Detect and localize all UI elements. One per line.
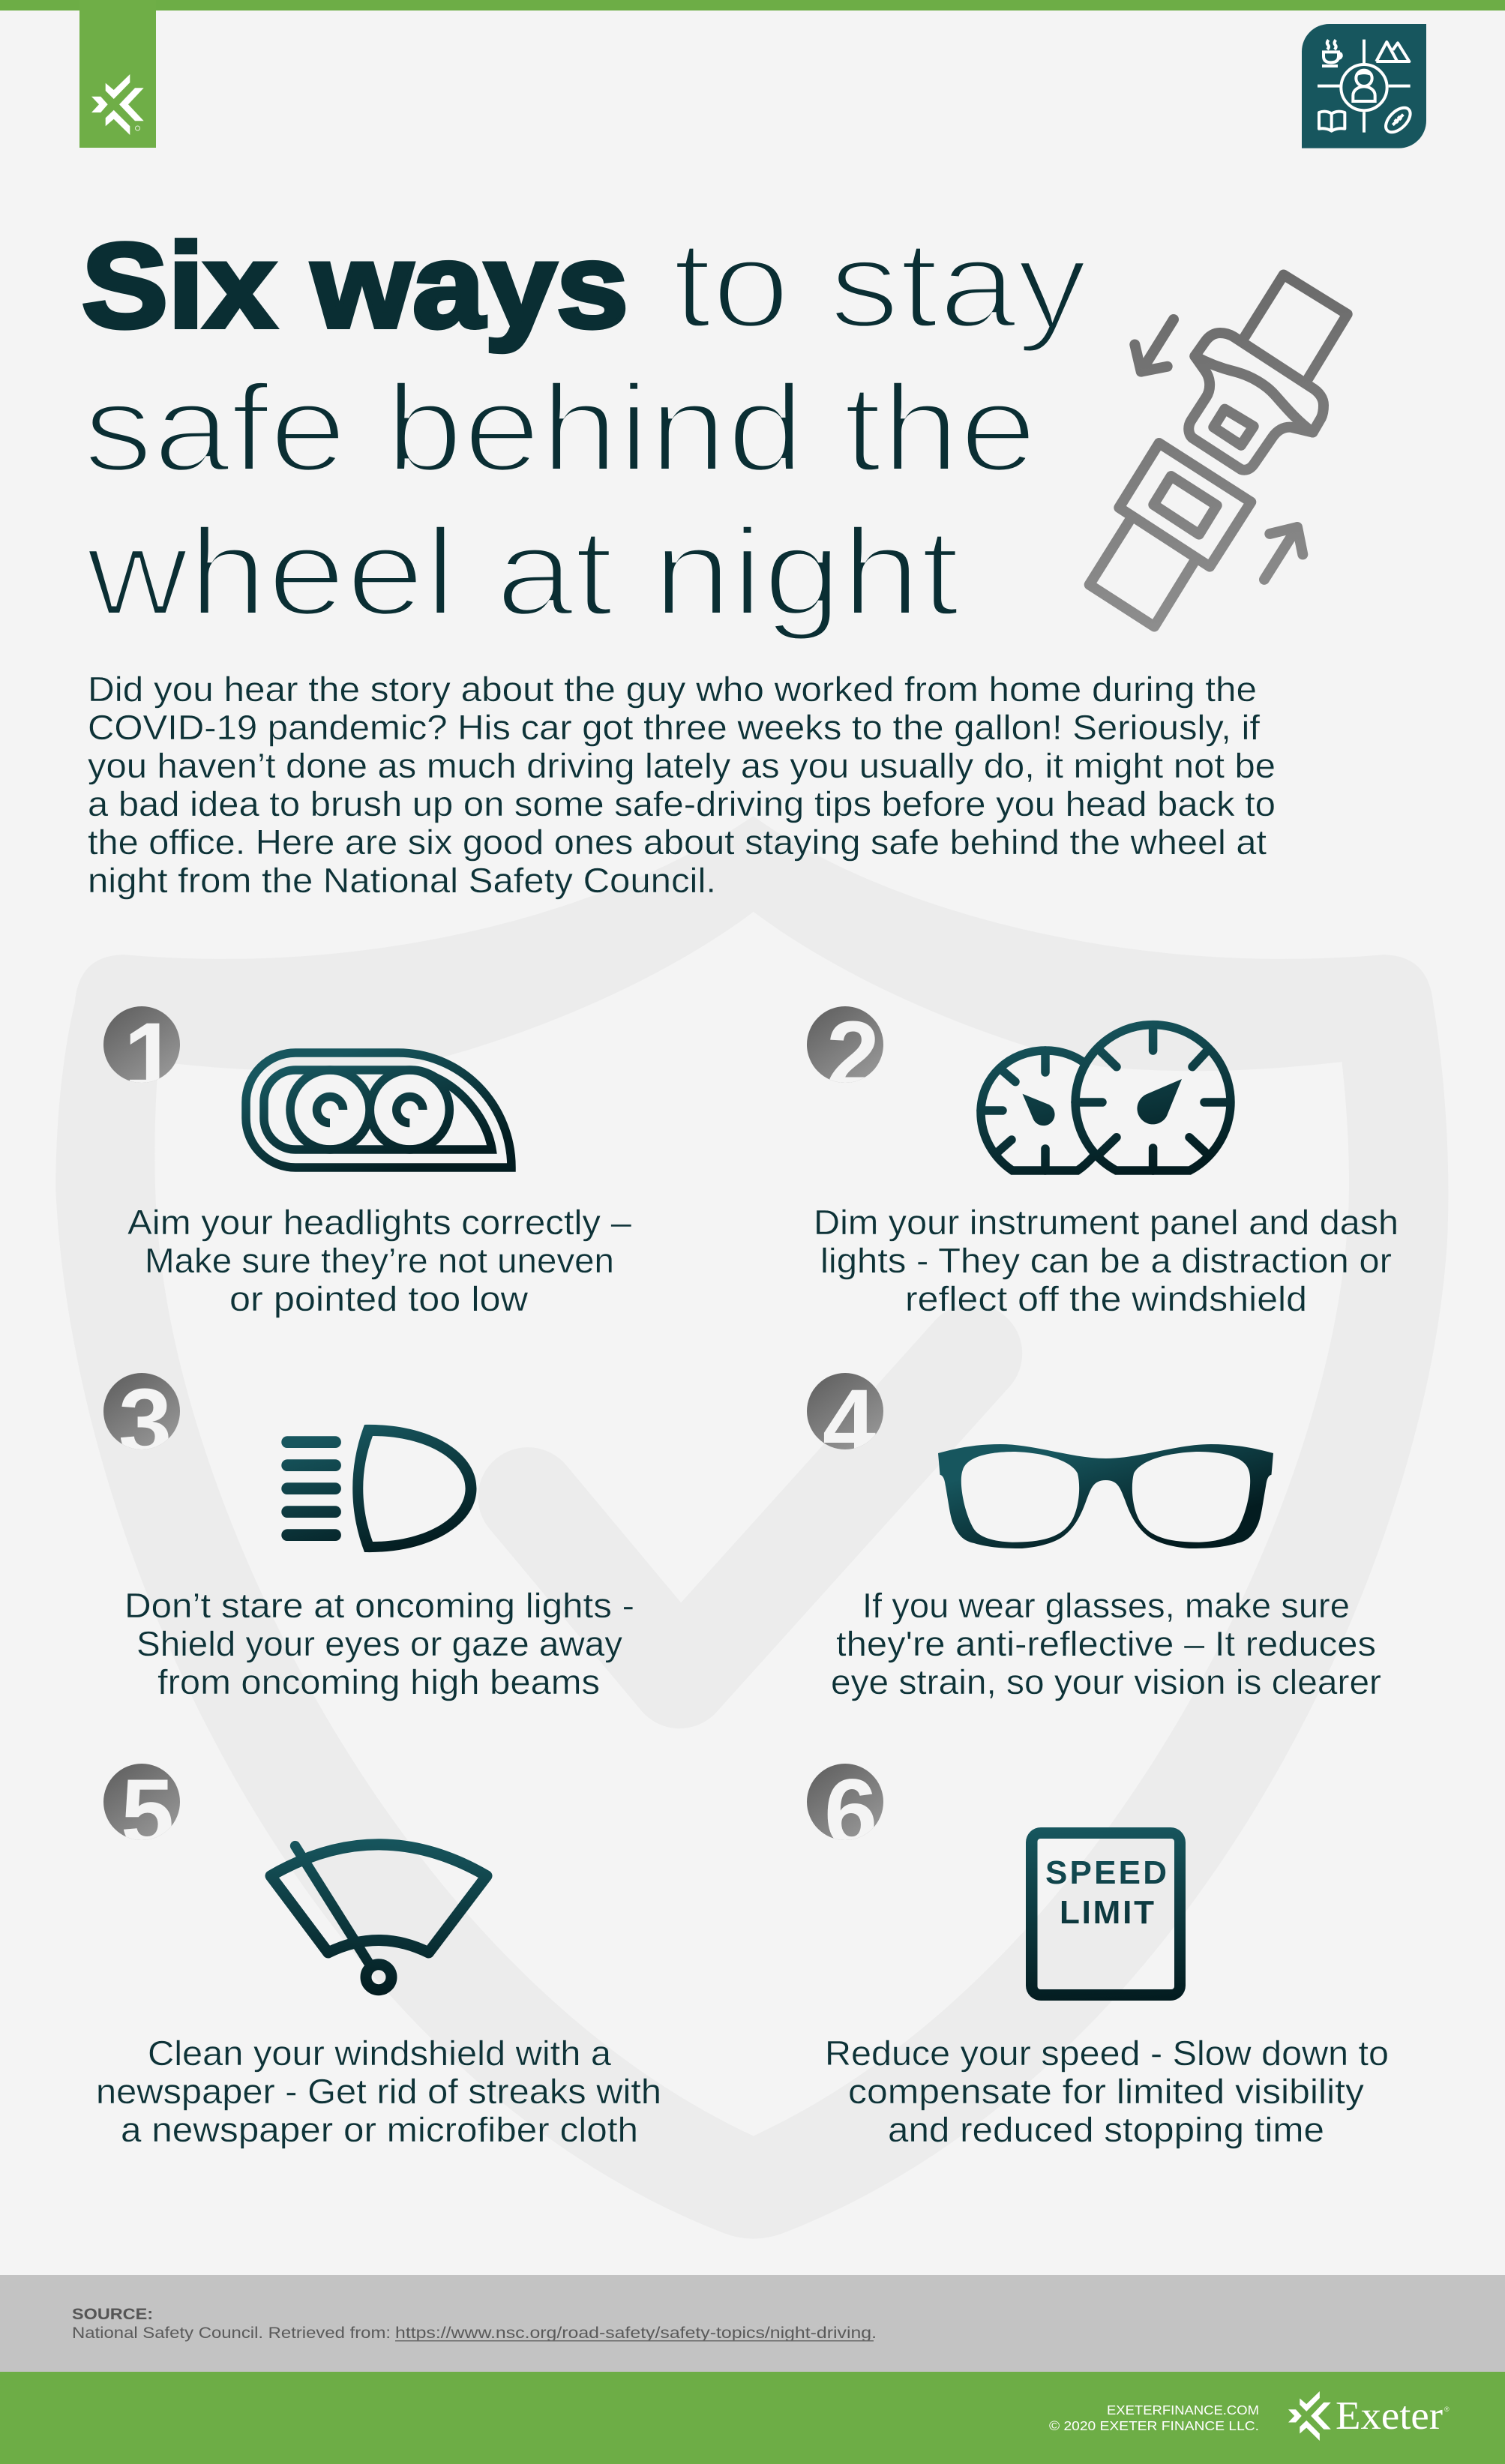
number badge 6: 6 <box>824 1760 877 1867</box>
number badge 1 <box>103 1006 180 1083</box>
top green bar <box>0 0 1505 10</box>
tip text 6: compensate for limited visibility <box>848 2072 1364 2111</box>
number badge 5: 5 <box>121 1760 174 1867</box>
title: safe behind the <box>83 359 1037 498</box>
number badge 1: 1 <box>124 1003 177 1111</box>
title: to stay <box>673 215 1087 354</box>
tip text 2: lights - They can be a distraction or <box>820 1241 1392 1280</box>
intro paragraph: night from the National Safety Council. <box>88 861 716 900</box>
tip text 4: eye strain, so your vision is clearer <box>831 1662 1381 1701</box>
intro paragraph: the office. Here are six good ones about staying safe behind the wheel at <box>88 823 1267 862</box>
title: Six ways <box>82 218 628 352</box>
intro paragraph: Did you hear the story about the guy who worked from home during the <box>88 670 1257 709</box>
source band: SOURCE: <box>72 2306 153 2323</box>
tip text 2: reflect off the windshield <box>905 1279 1307 1318</box>
intro paragraph <box>88 670 1276 900</box>
number badge 6 <box>807 1764 883 1840</box>
intro paragraph: you haven’t done as much driving lately as you usually do, it might not be <box>88 746 1276 785</box>
number badge 3 <box>103 1373 180 1449</box>
panel: tip 4 glasses <box>807 1370 1381 1701</box>
number badge 4 <box>807 1373 883 1449</box>
footer band <box>0 2372 1505 2464</box>
tip text 1: or pointed too low <box>229 1279 529 1318</box>
number badge 5 <box>103 1764 180 1840</box>
tip text 2: Dim your instrument panel and dash <box>814 1203 1399 1242</box>
icon: glasses <box>938 1444 1273 1548</box>
tip text 4 <box>831 1586 1381 1701</box>
number badge 2: 2 <box>826 1002 880 1109</box>
tip text 6 <box>825 2034 1389 2149</box>
badge: lifestyle icons <box>1302 24 1426 148</box>
footer band: © 2020 EXETER FINANCE LLC. <box>1049 2418 1259 2433</box>
icon: gauges <box>981 1025 1231 1171</box>
icon: headlight <box>246 1053 511 1168</box>
panel: tip 1 headlights <box>103 1003 631 1318</box>
tip text 1 <box>127 1203 631 1318</box>
icon: speed limit sign: SPEED <box>1045 1854 1167 1891</box>
icon: speed limit sign <box>1026 1827 1186 2001</box>
tip text 4: they're anti-reflective – It reduces <box>836 1624 1376 1663</box>
tip text 1: Make sure they’re not uneven <box>145 1241 614 1280</box>
footer logo mark <box>1288 2391 1331 2441</box>
icon: windshield wiper <box>271 1845 487 1990</box>
tip text 6: and reduced stopping time <box>888 2110 1324 2149</box>
footer band: ® <box>1444 2406 1450 2413</box>
tip text 3: Don’t stare at oncoming lights - <box>124 1586 634 1625</box>
tip text 5: newspaper - Get rid of streaks with <box>96 2072 661 2111</box>
title: wheel at night <box>85 503 960 642</box>
icon: seatbelt buckle <box>1090 274 1348 627</box>
icon: high beam <box>281 1425 477 1552</box>
tip text 1: Aim your headlights correctly – <box>127 1203 631 1242</box>
number badge 2 <box>807 1006 883 1083</box>
tip text 5 <box>96 2034 661 2149</box>
footer band: EXETERFINANCE.COM <box>1107 2403 1259 2418</box>
intro paragraph: a bad idea to brush up on some safe-driving tips before you head back to <box>88 784 1276 823</box>
title <box>82 215 1087 642</box>
panel: tip 2 instrument panel <box>807 1002 1399 1318</box>
panel: tip 6 speed <box>807 1760 1389 2149</box>
panel: tip 5 windshield <box>96 1760 661 2149</box>
background shield watermark <box>55 816 1448 2239</box>
source band: National Safety Council. Retrieved from: <box>72 2325 391 2342</box>
panel: tip 3 oncoming lights <box>103 1369 634 1701</box>
tip text 3: Shield your eyes or gaze away <box>136 1624 622 1663</box>
source band <box>0 2275 1505 2372</box>
footer band: Exeter <box>1336 2394 1443 2438</box>
tip text 5: Clean your windshield with a <box>148 2034 611 2073</box>
intro paragraph: COVID-19 pandemic? His car got three weeks to the gallon! Seriously, if <box>88 708 1260 747</box>
tip text 5: a newspaper or microfiber cloth <box>121 2110 638 2149</box>
tip text 3 <box>124 1586 634 1701</box>
tip text 6: Reduce your speed - Slow down to <box>825 2034 1389 2073</box>
number badge 3: 3 <box>118 1369 172 1476</box>
tip text 3: from oncoming high beams <box>157 1662 600 1701</box>
icon: speed limit sign: LIMIT <box>1060 1894 1154 1931</box>
logo tab <box>79 0 156 148</box>
source band: https://www.nsc.org/road-safety/safety-topics/night-driving. <box>395 2325 877 2342</box>
number badge 4: 4 <box>823 1370 876 1477</box>
tip text 4: If you wear glasses, make sure <box>862 1586 1350 1625</box>
tip text 2 <box>814 1203 1399 1318</box>
